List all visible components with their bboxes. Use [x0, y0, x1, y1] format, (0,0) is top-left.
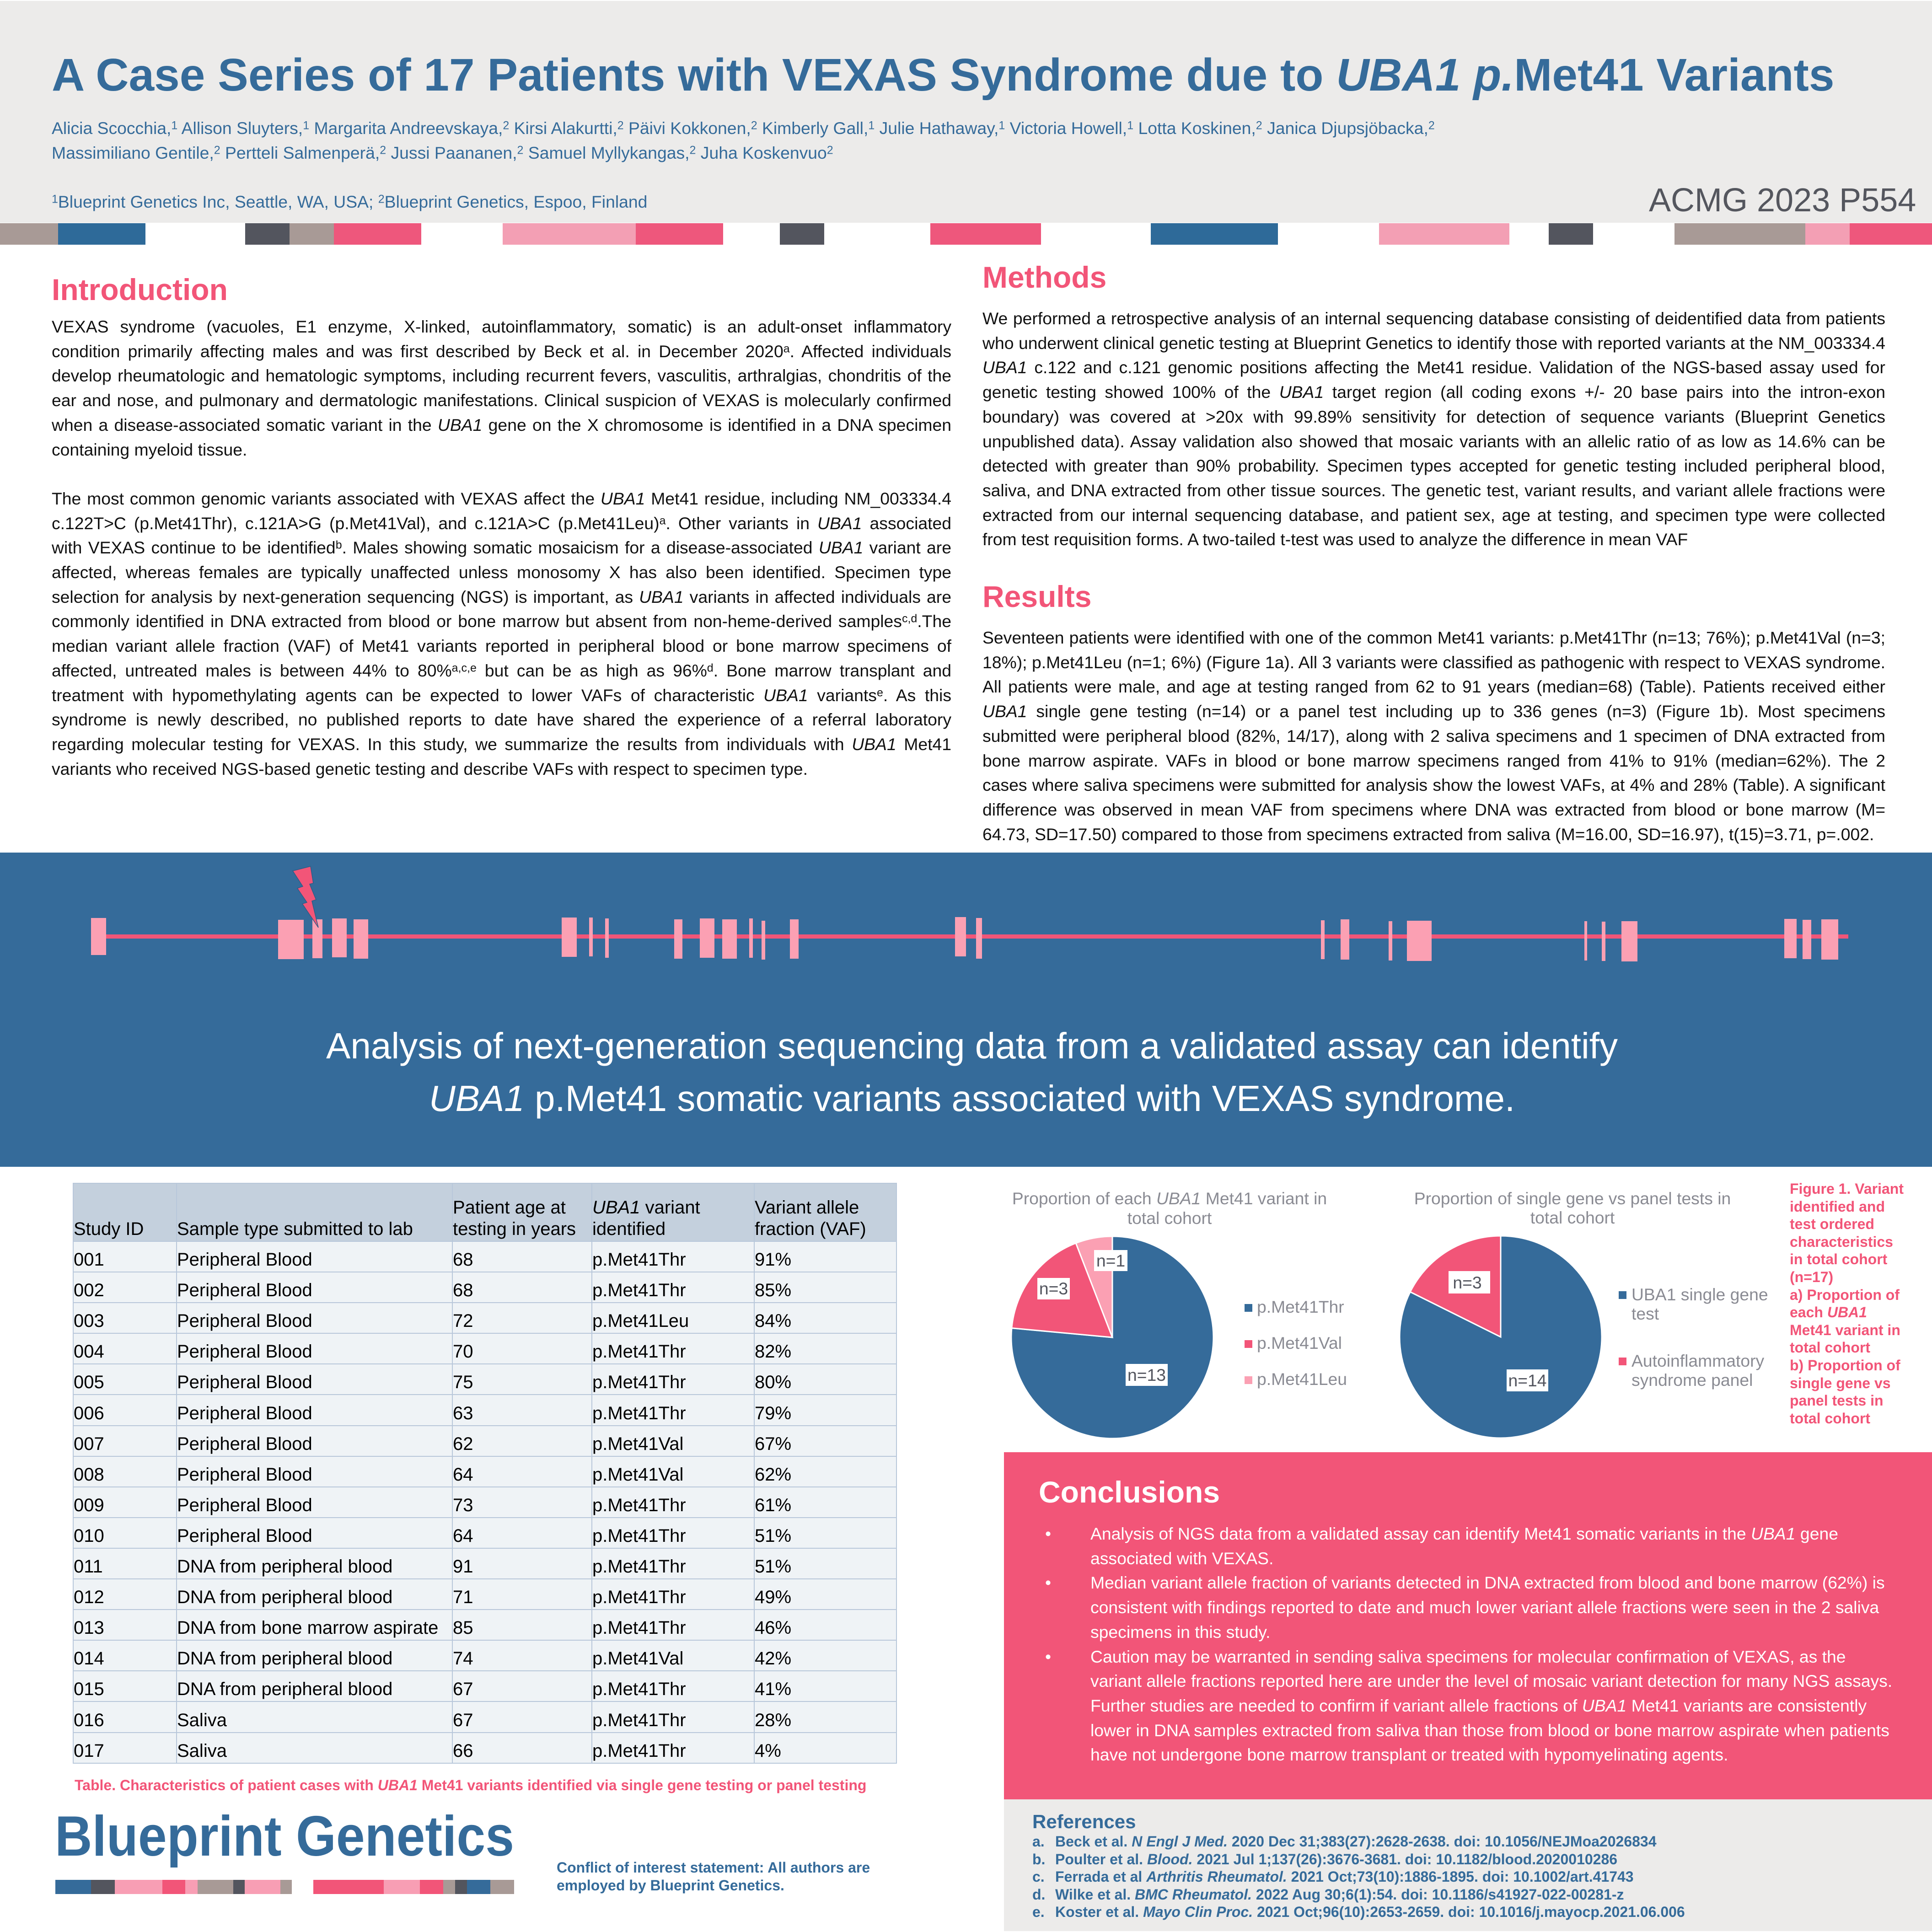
table: patient characteristics: Peripheral Blood — [177, 1495, 312, 1515]
text: introduction: selection for analysis by next-generation sequencing (NGS) is important, as UBA1 variants in affected individuals are — [52, 587, 951, 606]
text: results: difference was observed in mean VAF from specimens where DNA was extracted from blood or bone marrow (M= — [982, 800, 1885, 819]
table: patient characteristics: 014 — [74, 1648, 104, 1669]
reference entries: Beck et al. N Engl J Med. 2020 Dec 31;383(27):2628-2638. doi: 10.1056/NEJMoa2026834 — [1055, 1833, 1657, 1850]
color stripe band — [0, 0, 1932, 247]
table: patient characteristics: 51% — [755, 1526, 791, 1546]
text: results: All patients were male, and age at testing ranged from 62 to 91 years (median=68) (Table). Patients received either — [982, 677, 1885, 696]
pie chart: variant proportions: total cohort — [1127, 1208, 1212, 1228]
chart title: Proportion of each UBA1 Met41 variant in — [1012, 1189, 1327, 1208]
text: methods: We performed a retrospective analysis of an internal sequencing database consisting of deidentified data from patients — [982, 309, 1885, 328]
panel: conclusions: lower in DNA samples extracted from saliva than those from blood or bone marrow aspirate when patients — [1090, 1721, 1889, 1740]
text: methods: boundary) was covered at >20x with 99.89% sensitivity for detection of sequence variants (Blueprint Genetics — [982, 407, 1885, 426]
legend — [1619, 1291, 1626, 1299]
reference list: a. — [1032, 1833, 1045, 1850]
gene diagram — [0, 853, 1932, 990]
text: introduction: treatment with hypomethylating agents can be expected to lower VAFs of characteristic UBA1 variantse. As this — [52, 686, 951, 705]
table: patient characteristics: fraction (VAF) — [755, 1219, 866, 1239]
table: patient characteristics: p.Met41Thr — [592, 1710, 686, 1730]
table: patient characteristics: p.Met41Thr — [592, 1741, 686, 1761]
text: results: cases where saliva specimens were submitted for analysis show the lowest VAFs, at 4% and 28% (Table). A significant — [982, 775, 1885, 794]
figure caption: each UBA1 — [1790, 1304, 1867, 1320]
text: introduction: ear and nose, and pulmonary and dermatologic manifestations. Clinical suspicion of VEXAS is molecularly confirmed — [52, 391, 951, 410]
figure caption: total cohort — [1790, 1339, 1870, 1356]
table: patient characteristics: p.Met41Thr — [592, 1495, 686, 1515]
table: patient characteristics: 67 — [453, 1710, 473, 1730]
table: patient characteristics — [73, 1183, 897, 1764]
table: patient characteristics: 007 — [74, 1434, 104, 1454]
text: results: 18%); p.Met41Leu (n=1; 6%) (Figure 1a). All 3 variants were classified as pathogenic with respect to VEXAS syndrome. — [982, 653, 1885, 672]
figure caption: in total cohort — [1790, 1251, 1887, 1267]
text: methods: UBA1 c.122 and c.121 genomic positions affecting the Met41 residue. Validation of the NGS-based assay used for — [982, 358, 1885, 377]
panel: conclusions: have not undergone bone marrow transplant or treated with hypomyelinating agents. — [1090, 1745, 1728, 1764]
panel: conclusions: variant allele fractions reported here are under the level of mosaic variant detection for many NGS assays. — [1090, 1671, 1892, 1690]
panel: key message banner — [0, 853, 1932, 1167]
text: methods — [982, 306, 1885, 552]
table: patient characteristics: 91% — [755, 1250, 791, 1270]
reference entries: Poulter et al. Blood. 2021 Jul 1;137(26):3676-3681. doi: 10.1182/blood.2020010286 — [1055, 1851, 1617, 1868]
table: patient characteristics: 66 — [453, 1741, 473, 1761]
affiliations: 1Blueprint Genetics Inc, Seattle, WA, USA; 2Blueprint Genetics, Espoo, Finland — [52, 192, 647, 211]
table: patient characteristics: p.Met41Thr — [592, 1280, 686, 1300]
table: patient characteristics: DNA from peripheral blood — [177, 1679, 392, 1699]
table: patient characteristics: p.Met41Thr — [592, 1526, 686, 1546]
reference entries: Wilke et al. BMC Rheumatol. 2022 Aug 30;6(1):54. doi: 10.1186/s41927-022-00281-z — [1055, 1886, 1624, 1903]
heading: references: References — [1032, 1811, 1136, 1832]
panel: conclusions: • — [1045, 1524, 1051, 1543]
table: patient characteristics: 004 — [74, 1342, 104, 1362]
table: patient characteristics: Peripheral Blood — [177, 1526, 312, 1546]
table: patient characteristics: Study ID — [74, 1219, 144, 1239]
table: patient characteristics: 73 — [453, 1495, 473, 1515]
table: patient characteristics: Variant allele — [755, 1197, 859, 1218]
conflict of interest statement: Conflict of interest statement: All authors are — [557, 1859, 870, 1876]
table: patient characteristics: 62 — [453, 1434, 473, 1454]
figure caption: identified and — [1790, 1198, 1885, 1215]
text: methods: detected with greater than 90% probability. Specimen types accepted for genetic testing included peripheral blood, — [982, 456, 1885, 475]
reference entries: Koster et al. Mayo Clin Proc. 2021 Oct;96(10):2653-2659. doi: 10.1016/j.mayocp.2021.06.006 — [1055, 1904, 1685, 1920]
panel: conclusions: Median variant allele fraction of variants detected in DNA extracted from blood and bone marrow (62%) is — [1090, 1573, 1885, 1592]
table: patient characteristics: 4% — [755, 1741, 781, 1761]
authors: Massimiliano Gentile,2 Pertteli Salmenperä,2 Jussi Paananen,2 Samuel Myllykangas,2 Juha Koskenvuo2 — [52, 143, 833, 162]
authors: Alicia Scocchia,1 Allison Sluyters,1 Margarita Andreevskaya,2 Kirsi Alakurtti,2 Päivi Kokkonen,2 Kimberly Gall,1 Julie Hathaway,1 Victoria Howell,1 Lotta Koskinen,2 Janica Djupsjöbacka,2 — [52, 118, 1435, 138]
conflict of interest statement — [557, 1859, 870, 1894]
table: patient characteristics: 80% — [755, 1372, 791, 1392]
text: methods: from test requisition forms. A two-tailed t-test was used to analyze the difference in mean VAF — [982, 530, 1688, 549]
table: patient characteristics: 67 — [453, 1679, 473, 1699]
figure caption: Figure 1. Variant — [1790, 1181, 1904, 1197]
chart title: Proportion of single gene vs panel tests in — [1414, 1189, 1731, 1208]
panel: conclusions: Caution may be warranted in sending saliva specimens for molecular confirmation of VEXAS, as the — [1090, 1647, 1846, 1666]
table: patient characteristics: 015 — [74, 1679, 104, 1699]
text: methods: extracted from our internal sequencing database, and patient sex, age at testing, and specimen type were collected — [982, 505, 1885, 525]
pie chart: test type proportions: UBA1 single gene — [1631, 1285, 1768, 1304]
banner message: Analysis of next-generation sequencing data from a validated assay can identify — [326, 1025, 1618, 1066]
table: patient characteristics: DNA from peripheral blood — [177, 1587, 392, 1607]
pie chart: variant proportions — [1002, 1185, 1368, 1445]
banner message — [6, 1020, 1932, 1125]
table: patient characteristics: Saliva — [177, 1741, 227, 1761]
table: patient characteristics: Peripheral Blood — [177, 1311, 312, 1331]
text: results: UBA1 single gene testing (n=14) or a panel test including up to 336 genes (n=3) (Figure 1b). Most specimens — [982, 702, 1885, 721]
pie chart: variant proportions: p.Met41Thr — [1257, 1297, 1344, 1316]
panel: conclusions: • — [1045, 1647, 1051, 1666]
table: patient characteristics: 012 — [74, 1587, 104, 1607]
table: patient characteristics: 010 — [74, 1526, 104, 1546]
table: patient characteristics: p.Met41Thr — [592, 1556, 686, 1577]
text: introduction — [52, 315, 951, 781]
text: introduction: regarding molecular testing for VEXAS. In this study, we summarize the results from individuals with UBA1 Met41 — [52, 735, 951, 754]
pie chart: variant proportions: p.Met41Leu — [1257, 1369, 1347, 1389]
pie chart: variant proportions: n=3 — [1039, 1279, 1068, 1298]
table: patient characteristics: Peripheral Blood — [177, 1434, 312, 1454]
panel: conclusions: Analysis of NGS data from a validated assay can identify Met41 somatic variants in the UBA1 gene — [1090, 1524, 1838, 1543]
table: patient characteristics: UBA1 variant — [592, 1197, 700, 1218]
pie chart: variant proportions: n=1 — [1096, 1251, 1125, 1270]
table caption: Table. Characteristics of patient cases with UBA1 Met41 variants identified via single gene testing or panel testing — [75, 1777, 866, 1793]
table: patient characteristics: 49% — [755, 1587, 791, 1607]
table: patient characteristics: 68 — [453, 1280, 473, 1300]
table: patient characteristics: 28% — [755, 1710, 791, 1730]
table: patient characteristics: 62% — [755, 1465, 791, 1485]
table: patient characteristics: 003 — [74, 1311, 104, 1331]
table: patient characteristics: 72 — [453, 1311, 473, 1331]
pie chart: test type proportions: n=14 — [1508, 1371, 1547, 1390]
table: patient characteristics: p.Met41Leu — [592, 1311, 689, 1331]
text: methods: saliva, and DNA extracted from other tissue sources. The genetic test, variant results, and variant allele fractions were — [982, 481, 1885, 500]
reference list: d. — [1032, 1886, 1045, 1903]
table: patient characteristics: Peripheral Blood — [177, 1372, 312, 1392]
table: patient characteristics: Peripheral Blood — [177, 1342, 312, 1362]
heading: methods: Methods — [982, 260, 1106, 294]
table: patient characteristics: 46% — [755, 1618, 791, 1638]
figure caption: single gene vs — [1790, 1375, 1891, 1391]
reference entries — [1055, 1833, 1685, 1921]
banner message: UBA1 p.Met41 somatic variants associated with VEXAS syndrome. — [429, 1078, 1515, 1119]
table: patient characteristics: 61% — [755, 1495, 791, 1515]
pie chart: test type proportions: Autoinflammatory — [1631, 1351, 1765, 1370]
text: introduction: VEXAS syndrome (vacuoles, E1 enzyme, X-linked, autoinflammatory, somatic) is an adult-onset inflammatory — [52, 317, 951, 336]
logo: Blueprint Genetics: Blueprint Genetics — [55, 1805, 514, 1868]
text: introduction: commonly identified in DNA extracted from blood or bone marrow but absent from non-heme-derived samplesc,d.The — [52, 612, 951, 631]
pie chart: test type proportions: test — [1631, 1304, 1659, 1323]
table: patient characteristics: 002 — [74, 1280, 104, 1300]
table: patient characteristics: 008 — [74, 1465, 104, 1485]
heading: introduction: Introduction — [52, 273, 228, 306]
legend — [1245, 1304, 1252, 1312]
table: patient characteristics: Peripheral Blood — [177, 1280, 312, 1300]
panel: conclusions: • — [1045, 1573, 1051, 1592]
figure caption: characteristics — [1790, 1234, 1893, 1250]
table: patient characteristics: 009 — [74, 1495, 104, 1515]
table: patient characteristics: p.Met41Thr — [592, 1342, 686, 1362]
table: patient characteristics: 85% — [755, 1280, 791, 1300]
pie chart: test type proportions: syndrome panel — [1631, 1370, 1753, 1390]
text: results: Seventeen patients were identified with one of the common Met41 variants: p.Met41Thr (n=13; 76%); p.Met41Val (n=3; — [982, 628, 1885, 647]
panel: references — [1004, 1799, 1932, 1931]
panel: conclusions — [1004, 1452, 1932, 1799]
reference list: e. — [1032, 1904, 1045, 1920]
text: introduction: when a disease-associated somatic variant in the UBA1 gene on the X chromosome is identified in a DNA specimen — [52, 415, 951, 435]
table: patient characteristics: 006 — [74, 1403, 104, 1423]
table: patient characteristics: 70 — [453, 1342, 473, 1362]
table: patient characteristics: 64 — [453, 1526, 473, 1546]
table: patient characteristics: 79% — [755, 1403, 791, 1423]
pie chart: variant proportions: p.Met41Val — [1257, 1333, 1342, 1352]
figure caption: Met41 variant in — [1790, 1322, 1900, 1338]
panel: conclusions: associated with VEXAS. — [1090, 1549, 1273, 1568]
table: patient characteristics: p.Met41Thr — [592, 1372, 686, 1392]
text: introduction: containing myeloid tissue. — [52, 440, 247, 459]
table: patient characteristics: 011 — [74, 1556, 103, 1577]
text: introduction: c.122T>C (p.Met41Thr), c.121A>G (p.Met41Val), and c.121A>C (p.Met41Leu)a. Other variants in UBA1 associated — [52, 514, 951, 533]
table: patient characteristics: 63 — [453, 1403, 473, 1423]
figure caption: b) Proportion of — [1790, 1357, 1900, 1374]
table: patient characteristics: 71 — [453, 1587, 473, 1607]
heading: results: Results — [982, 580, 1091, 613]
table: patient characteristics: 42% — [755, 1648, 791, 1669]
table: patient characteristics: Sample type submitted to lab — [177, 1219, 413, 1239]
table: patient characteristics: 013 — [74, 1618, 104, 1638]
table: patient characteristics: DNA from peripheral blood — [177, 1556, 392, 1577]
conclusion bullets — [1004, 1521, 1932, 1522]
authors — [52, 116, 1435, 165]
table: patient characteristics: 41% — [755, 1679, 791, 1699]
table: patient characteristics: 001 — [74, 1250, 104, 1270]
panel: conclusions: Further studies are needed to confirm if variant allele fractions of UBA1 Met41 variants are consistently — [1090, 1696, 1867, 1715]
text: introduction: The most common genomic variants associated with VEXAS affect the UBA1 Met41 residue, including NM_003334.4 — [52, 489, 951, 508]
text: methods: unpublished data). Assay validation also showed that mosaic variants with an allelic ratio of as low as 14.6% can be — [982, 432, 1885, 451]
table: patient characteristics: 82% — [755, 1342, 791, 1362]
text: introduction: develop rheumatologic and hematologic symptoms, including recurrent fevers, vasculitis, arthralgias, chondritis of the — [52, 366, 951, 385]
table: patient characteristics: 017 — [74, 1741, 104, 1761]
text: methods: genetic testing showed 100% of the UBA1 target region (all coding exons +/- 20 base pairs into the intron-exon — [982, 382, 1885, 402]
pie chart: variant proportions: n=13 — [1127, 1365, 1166, 1385]
text: introduction: affected, untreated males is between 44% to 80%a,c,e but can be as high as 96%d. Bone marrow transplant and — [52, 661, 951, 680]
pie chart: test type proportions: total cohort — [1530, 1208, 1615, 1227]
table: patient characteristics: testing in years — [453, 1219, 576, 1239]
text: introduction: variants who received NGS-based genetic testing and describe VAFs with respect to specimen type. — [52, 759, 808, 778]
text: results — [982, 626, 1885, 847]
text: introduction: median variant allele fraction (VAF) of Met41 variants reported in peripheral blood or bone marrow specimens of — [52, 636, 951, 655]
logo: Blueprint Genetics — [46, 1807, 531, 1903]
pie chart: test type proportions: n=3 — [1453, 1273, 1482, 1292]
icon: lightning bolt mutation marker — [293, 866, 318, 928]
reference list: b. — [1032, 1851, 1045, 1868]
panel: conclusions: specimens in this study. — [1090, 1622, 1271, 1642]
table: patient characteristics: p.Met41Val — [592, 1648, 683, 1669]
text: results: submitted were peripheral blood (82%, 14/17), along with 2 saliva specimens and 1 specimen of DNA extracted from — [982, 726, 1885, 746]
table: patient characteristics: 67% — [755, 1434, 791, 1454]
table: patient characteristics: identified — [592, 1219, 665, 1239]
table: patient characteristics: 005 — [74, 1372, 104, 1392]
table: patient characteristics: Saliva — [177, 1710, 227, 1730]
text: introduction: condition primarily affecting males and was first described by Beck et al. in December 2020a. Affected individuals — [52, 342, 951, 361]
text: introduction: affected, whereas females are typically unaffected unless monosomy X has also been identified. Specimen type — [52, 563, 951, 582]
table: patient characteristics: 85 — [453, 1618, 473, 1638]
table: patient characteristics: p.Met41Thr — [592, 1679, 686, 1699]
pie chart: test type proportions — [1390, 1185, 1779, 1445]
figure caption: total cohort — [1790, 1410, 1870, 1427]
table: patient characteristics: 51% — [755, 1556, 791, 1577]
panel: conclusions: consistent with findings reported to date and much lower variant allele fractions were seen in the 2 saliva — [1090, 1598, 1879, 1617]
text: results: 64.73, SD=17.50) compared to those from specimens extracted from saliva (M=16.00, SD=16.97), t(15)=3.71, p=.002. — [982, 825, 1874, 844]
reference list: c. — [1032, 1868, 1045, 1885]
table: patient characteristics: Peripheral Blood — [177, 1250, 312, 1270]
table: patient characteristics: DNA from peripheral blood — [177, 1648, 392, 1669]
figure caption: panel tests in — [1790, 1392, 1884, 1409]
text: introduction: syndrome is newly described, no published reports to date have shared the experience of a referral laboratory — [52, 710, 951, 729]
table: patient characteristics: Patient age at — [453, 1197, 566, 1218]
table: patient characteristics: p.Met41Val — [592, 1465, 683, 1485]
table: patient characteristics: p.Met41Thr — [592, 1250, 686, 1270]
table: patient characteristics: 016 — [74, 1710, 104, 1730]
heading: conclusions: Conclusions — [1039, 1475, 1220, 1509]
table: patient characteristics: DNA from bone marrow aspirate — [177, 1618, 438, 1638]
table: patient characteristics: 68 — [453, 1250, 473, 1270]
figure caption — [1790, 1180, 1904, 1427]
table: patient characteristics: p.Met41Thr — [592, 1587, 686, 1607]
table: patient characteristics: 75 — [453, 1372, 473, 1392]
reference entries: Ferrada et al Arthritis Rheumatol. 2021 Oct;73(10):1886-1895. doi: 10.1002/art.41743 — [1055, 1868, 1634, 1885]
text: results: bone marrow aspirate. VAFs in blood or bone marrow specimens ranged from 41% to 91% (median=62%). The 2 — [982, 751, 1885, 770]
panel: header — [0, 1, 1932, 223]
figure caption: (n=17) — [1790, 1269, 1833, 1285]
reference list — [1032, 1833, 1045, 1921]
table: patient characteristics: p.Met41Val — [592, 1434, 683, 1454]
table: patient characteristics: p.Met41Thr — [592, 1618, 686, 1638]
poster number: ACMG 2023 P554 — [1649, 182, 1916, 219]
table: patient characteristics: Peripheral Blood — [177, 1403, 312, 1423]
figure caption: test ordered — [1790, 1216, 1874, 1232]
figure caption: a) Proportion of — [1790, 1287, 1900, 1303]
table: patient characteristics: p.Met41Thr — [592, 1403, 686, 1423]
table: patient characteristics: 84% — [755, 1311, 791, 1331]
table: patient characteristics: 74 — [453, 1648, 473, 1669]
text: introduction: with VEXAS continue to be identifiedb. Males showing somatic mosaicism for a disease-associated UBA1 variant are — [52, 538, 951, 557]
table: patient characteristics: Peripheral Blood — [177, 1465, 312, 1485]
text: methods: who underwent clinical genetic testing at Blueprint Genetics to identify those with reported variants at the NM_003334.4 — [982, 333, 1885, 353]
table: patient characteristics: 64 — [453, 1465, 473, 1485]
conflict of interest statement: employed by Blueprint Genetics. — [557, 1877, 784, 1894]
table: patient characteristics: 91 — [453, 1556, 473, 1577]
title: A Case Series of 17 Patients with VEXAS Syndrome due to UBA1 p.Met41 Variants — [52, 49, 1834, 101]
